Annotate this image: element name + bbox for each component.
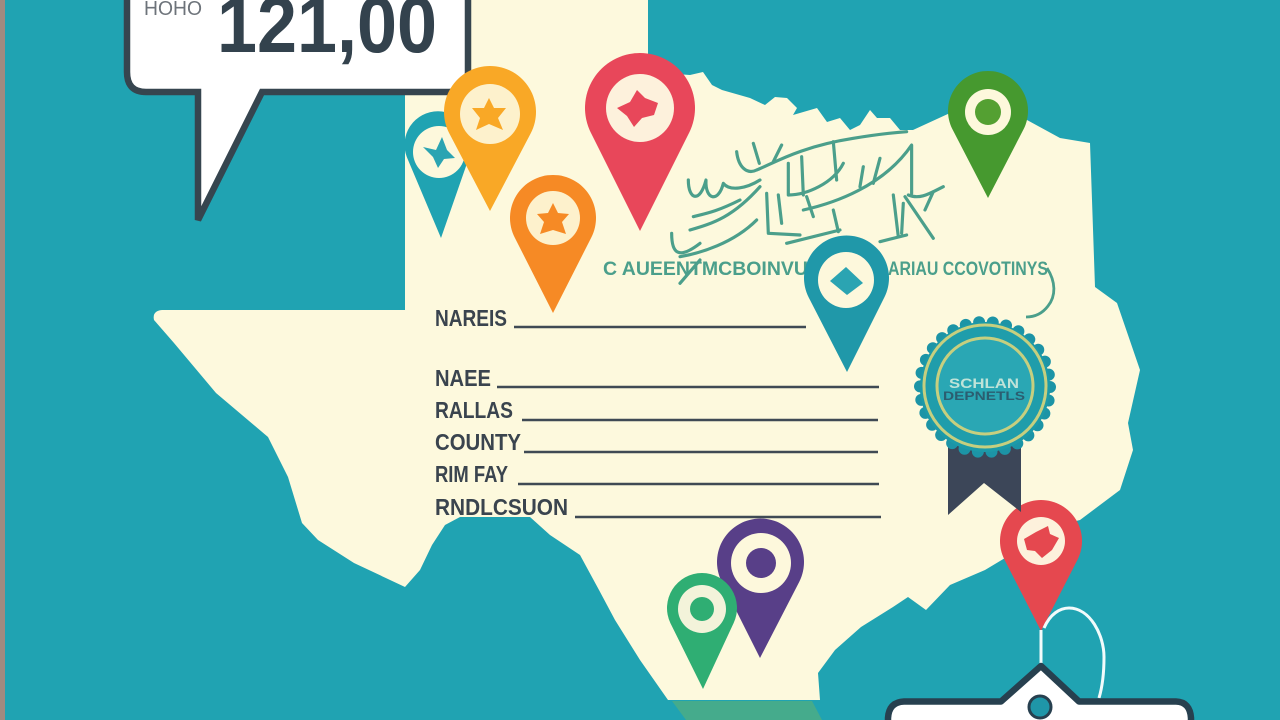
pin: small teal xyxy=(404,111,471,238)
badge text: SCHLAN xyxy=(949,375,1019,391)
form row: region: RNDLCSUON xyxy=(435,494,568,520)
pin: red large xyxy=(585,53,695,231)
subheading text: ARIAU CCOVOTINYS xyxy=(888,259,1048,280)
subheading text: C AUEENTMCBOINVU xyxy=(603,259,808,280)
form row: county: COUNTY xyxy=(435,429,521,455)
pin: orange xyxy=(510,175,596,313)
form row: rim fay: RIM FAY xyxy=(435,461,508,487)
badge text: DEPNETLS xyxy=(943,389,1025,403)
award badge xyxy=(920,322,1050,515)
pin: green bottom xyxy=(667,573,737,689)
badge ribbon xyxy=(948,440,1021,515)
form row: names: NAREIS xyxy=(435,305,507,331)
badge text xyxy=(943,375,1025,403)
tag string xyxy=(1041,608,1104,698)
map of Texas xyxy=(154,0,1140,700)
callout: total figure xyxy=(127,0,468,220)
pin: teal centre xyxy=(804,235,889,372)
form list xyxy=(435,305,881,520)
price tag with string xyxy=(888,608,1191,720)
form row: name: NAEE xyxy=(435,365,491,391)
pin: green top right xyxy=(948,71,1028,198)
pin: purple xyxy=(717,519,804,658)
badge rosette xyxy=(920,322,1050,452)
pin: amber xyxy=(444,66,536,211)
calligraphic heading scribble xyxy=(672,132,943,283)
tag body xyxy=(888,666,1191,720)
bottom green strip xyxy=(672,701,822,720)
tag eyelet xyxy=(1029,696,1051,718)
left edge strip xyxy=(0,0,5,720)
pin: red south east xyxy=(1000,500,1082,631)
subheading text xyxy=(603,259,1054,317)
form row: dallas: RALLAS xyxy=(435,397,513,423)
